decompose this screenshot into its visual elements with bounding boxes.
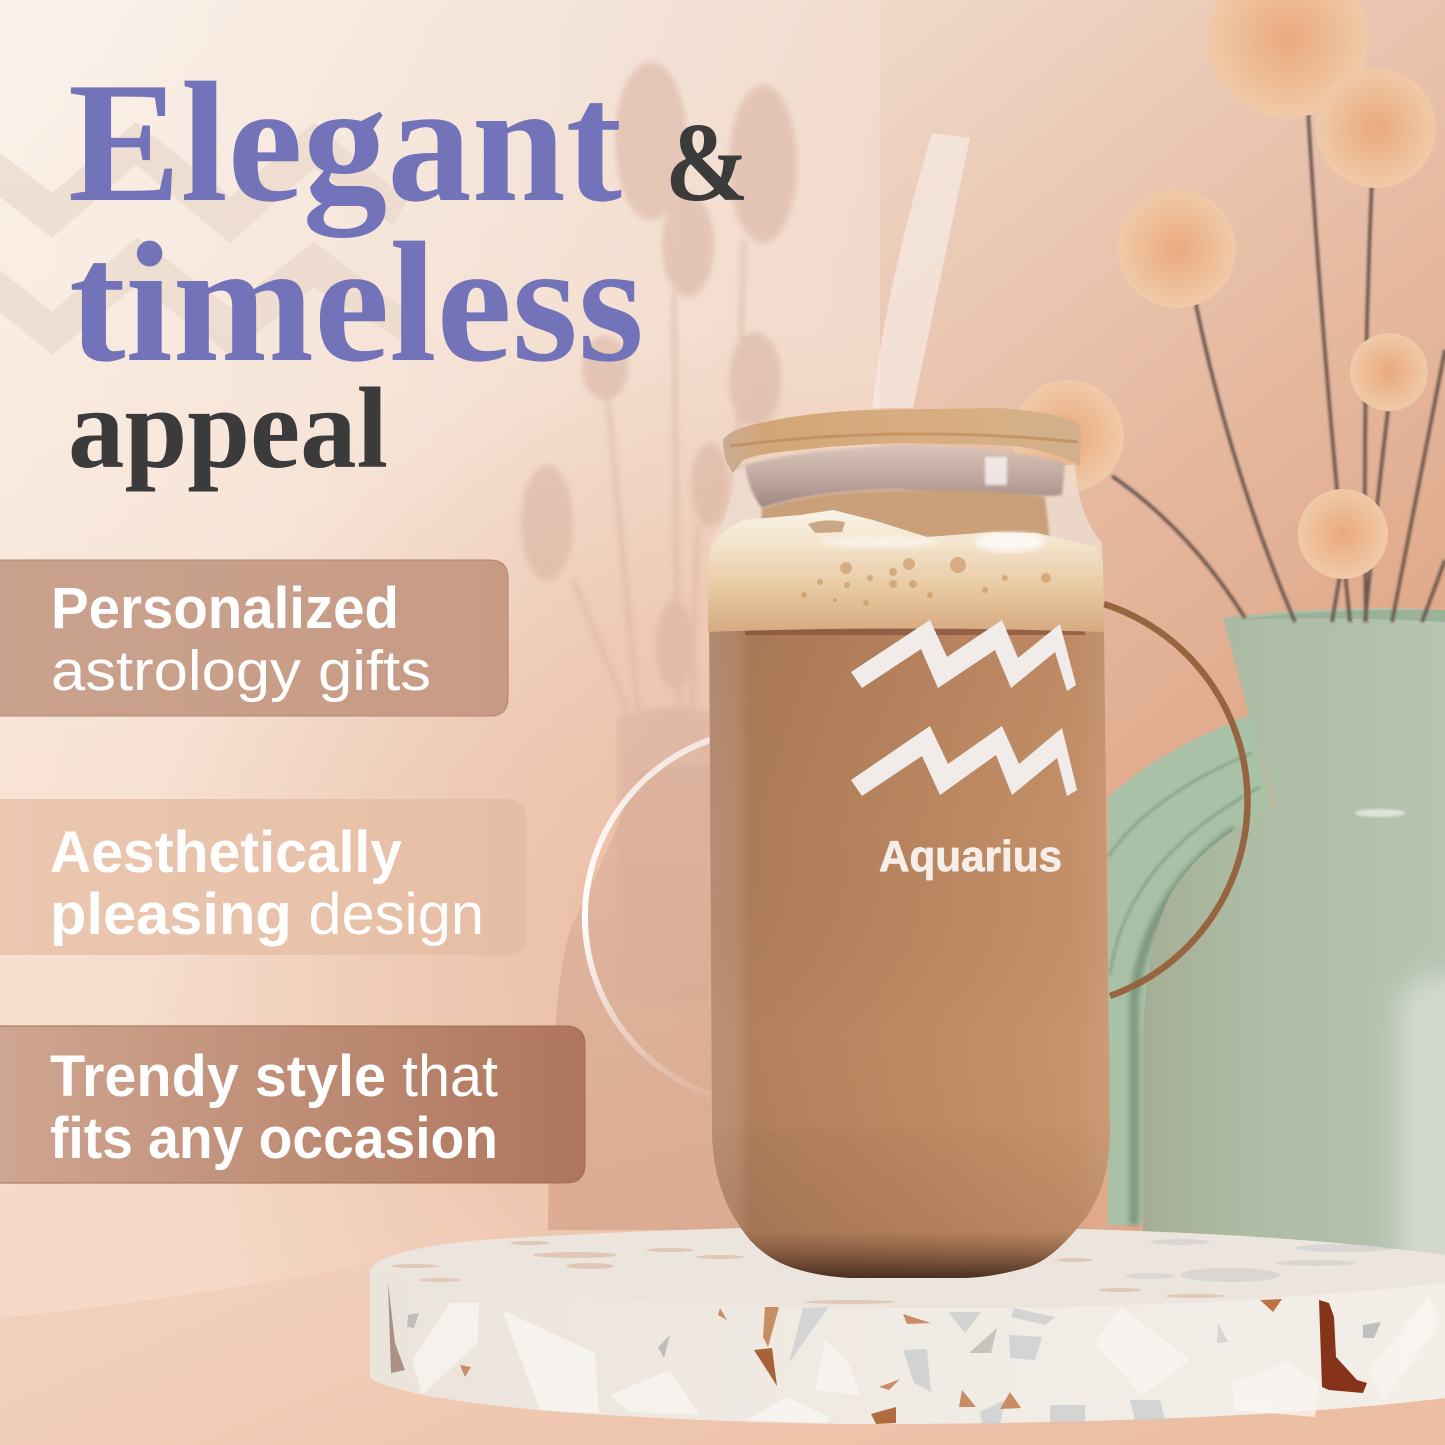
vase bbox=[1143, 608, 1445, 1295]
product label: Aquarius bbox=[879, 832, 1062, 881]
tan lid reflection bbox=[760, 490, 1050, 540]
panel: aesthetically: Aesthetically bbox=[50, 820, 402, 885]
top face speckles bbox=[370, 1226, 1445, 1308]
dark coffee line bbox=[745, 628, 1085, 635]
title: Elegant bbox=[68, 48, 622, 238]
panel: personalized bbox=[0, 560, 508, 716]
flower shadows on wall bbox=[521, 62, 797, 1000]
jar neck bbox=[708, 465, 1104, 635]
panel: aesthetically bbox=[0, 799, 526, 955]
glass rim band bbox=[745, 445, 1065, 508]
foam highlight bbox=[975, 532, 1045, 552]
straw bbox=[872, 133, 970, 408]
foam blotch bbox=[808, 520, 845, 533]
panel: trendy bbox=[0, 1026, 585, 1183]
glass jar bbox=[708, 408, 1110, 1278]
icon: aquarius symbol bbox=[851, 620, 1077, 796]
title: timeless bbox=[69, 208, 644, 398]
brown ring right bbox=[1104, 604, 1247, 996]
title bbox=[68, 48, 749, 493]
bamboo lid bbox=[723, 408, 1081, 473]
dried flowers bbox=[1012, 0, 1445, 622]
panel: personalized: astrology gifts bbox=[51, 639, 431, 703]
foam bubbles bbox=[801, 557, 1051, 606]
decorative zigzag shadow bbox=[0, 122, 408, 355]
rim glare bbox=[985, 457, 1007, 485]
foam bbox=[708, 510, 1104, 632]
large wall shadow behind glass bbox=[548, 760, 760, 1230]
marble plinth bbox=[370, 1226, 1445, 1424]
panel: aesthetically: pleasing design bbox=[50, 882, 484, 947]
coffee body bbox=[709, 628, 1110, 1278]
title: & bbox=[665, 101, 749, 225]
white ring left bbox=[585, 740, 712, 1095]
panel: trendy: Trendy style that bbox=[50, 1044, 498, 1109]
panel: personalized: Personalized bbox=[51, 576, 399, 641]
arch decoration bbox=[1108, 715, 1273, 1225]
coffee vertical shading bbox=[710, 630, 1109, 1130]
coffee base shading bbox=[712, 1120, 1110, 1278]
title: appeal bbox=[68, 365, 388, 493]
panel: trendy: fits any occasion bbox=[50, 1106, 498, 1171]
